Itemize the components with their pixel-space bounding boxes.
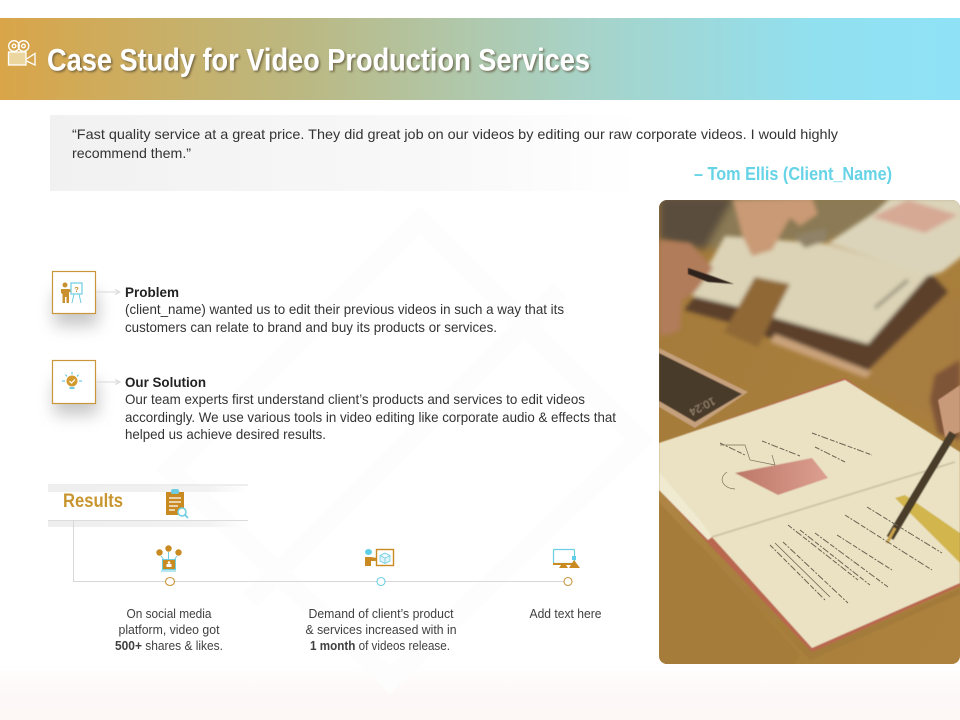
icon tile: problem: ? [74,285,79,294]
text: result 2 [306,607,457,653]
text: result 2: & services increased with in [306,623,457,637]
timeline marker 1 [166,578,174,586]
text: result 3: Add text here [530,607,602,621]
icon: film camera [8,41,35,65]
text: problem: (client_name) wanted us to edit their previous videos in such a way that its [125,301,564,317]
text: our solution: accordingly. We use various tools in video editing like corporate audio & effects that [125,409,616,425]
handwriting strokes [720,433,942,603]
photo: hands writing in notebook [659,196,960,670]
text: result 1: platform, video got [118,623,220,637]
icon tile: problem [52,272,98,326]
text: our solution: Our Solution [125,374,206,390]
icon: presenter with product box [365,549,394,566]
text: result 1: 500+ shares & likes. [115,639,223,653]
icon: computer workstation [553,550,580,568]
timeline connector [74,521,568,582]
arrow: problem [96,290,120,294]
arrow: solution [96,380,120,384]
text: result 1: On social media [126,607,212,621]
panel: client quote: “Fast quality service at a great price. They did great job on our videos by editing our raw corporate videos. I would highly [72,126,838,142]
panel: client quote [50,115,838,191]
text: our solution [125,374,616,442]
icon: clipboard with magnifier [166,489,188,518]
timeline marker 2 [377,578,385,586]
icon: social media network [156,545,182,571]
icon tile: solution [52,360,98,415]
text: our solution: Our team experts first understand client’s products and services to edit videos [125,391,585,407]
title: Case Study for Video Production Services [47,42,590,78]
text: result 2: 1 month of videos release. [310,639,450,653]
photo: hands writing in notebook: 10:24 [687,394,717,418]
text: result 2: Demand of client’s product [308,607,454,621]
timeline marker 3 [564,578,572,586]
heading: results: Results [63,491,123,512]
text: problem [125,284,564,335]
header banner [0,18,960,100]
heading: results [48,485,248,527]
text: our solution: helped us achieve desired results. [125,426,326,442]
text: result 1 [115,607,223,653]
text: problem: customers can relate to brand and buy its products or services. [125,319,497,335]
text: problem: Problem [125,284,179,300]
client name: – Tom Ellis (Client_Name) [694,164,892,184]
panel: client quote: recommend them.” [72,145,191,161]
